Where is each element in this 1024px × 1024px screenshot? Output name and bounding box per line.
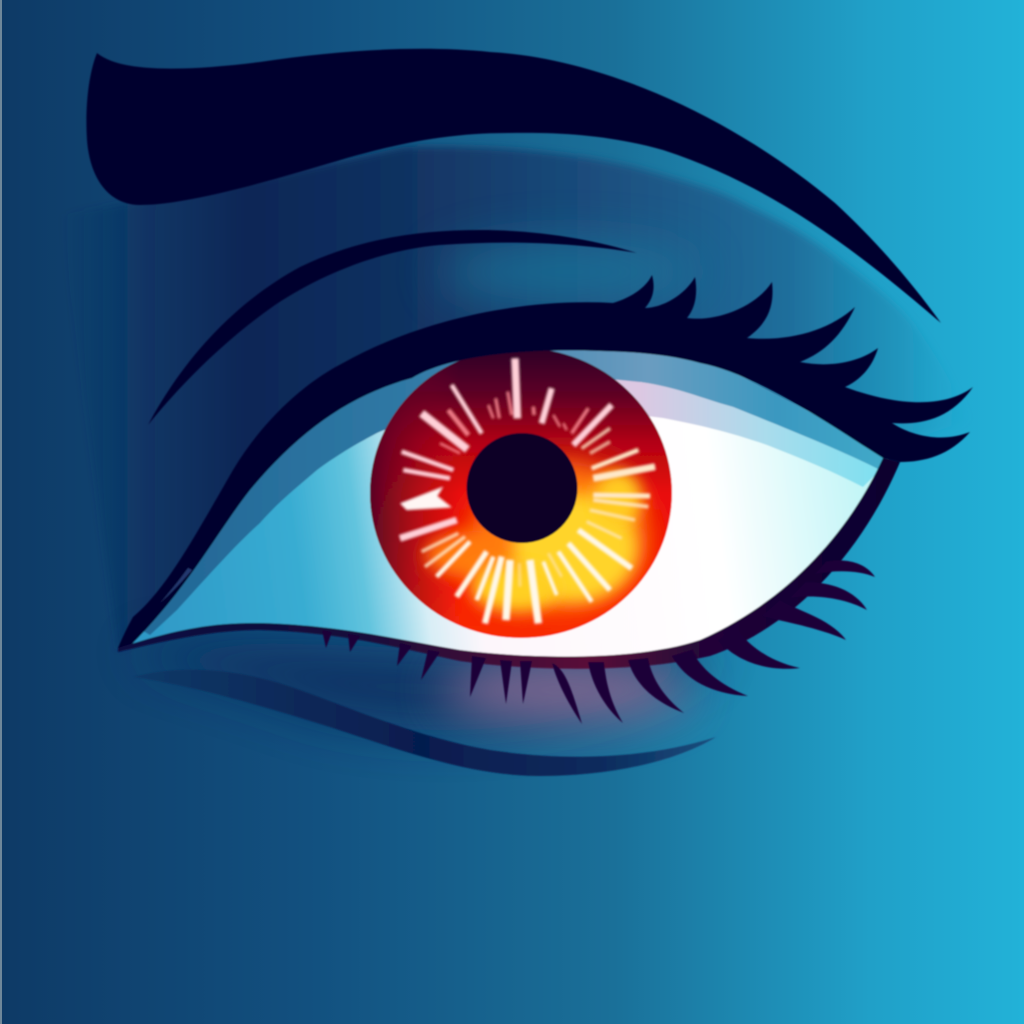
lower swoop shadow [133, 670, 716, 776]
eye white with bands [131, 349, 890, 658]
iris [370, 348, 672, 638]
iris base [370, 348, 672, 638]
glow: above upper lid [440, 242, 700, 302]
iris rays [400, 358, 655, 623]
upper crease line [148, 230, 637, 425]
glow: below lashes [440, 658, 690, 722]
eyebrow [86, 49, 941, 323]
shadow: under the lower lid [130, 644, 720, 730]
pupil [466, 433, 578, 543]
iris bright wedge [400, 487, 452, 510]
shadow: brow and socket [60, 147, 970, 650]
left edge strip [0, 0, 2, 1024]
upper lid and lashes [118, 275, 973, 649]
upper light band [600, 378, 880, 487]
upper shadow band [143, 348, 890, 636]
iris glow [425, 461, 648, 612]
lower lashes [322, 561, 875, 724]
lid sliver highlight [160, 568, 192, 603]
lower lid line [118, 458, 900, 669]
